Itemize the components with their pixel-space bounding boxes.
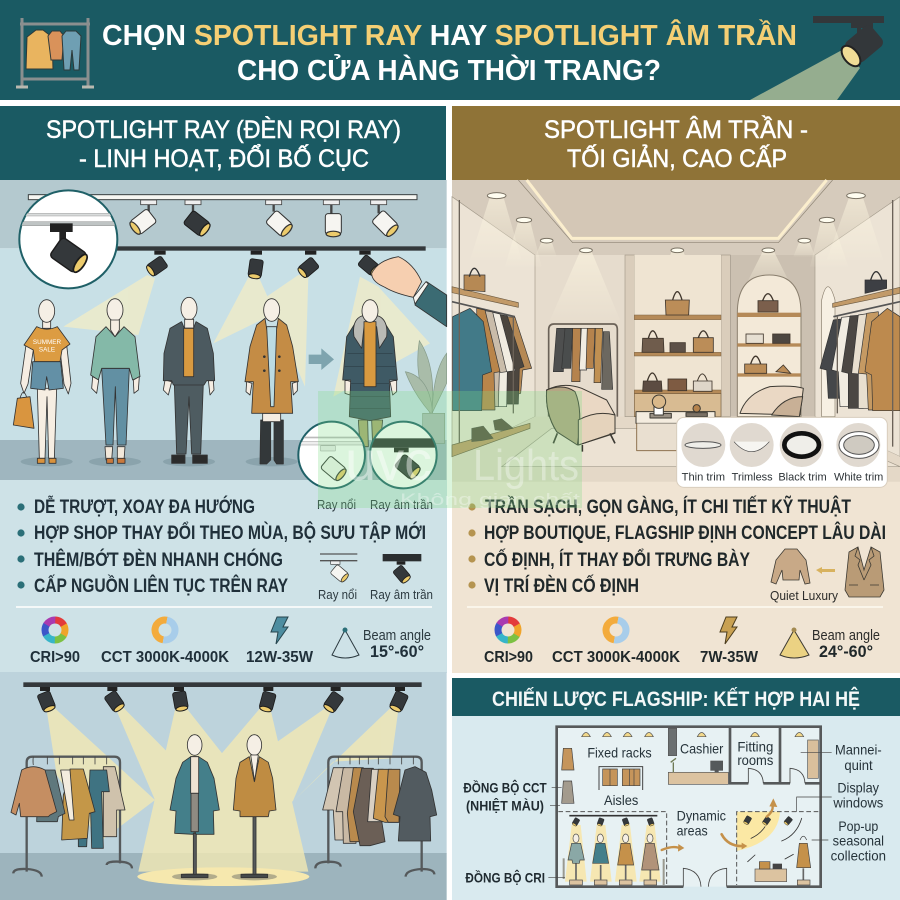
stat: CRI: CRI>90 [30, 649, 80, 666]
left clothing rack [452, 200, 532, 457]
plan labels: Mannei- [835, 741, 882, 757]
plan labels: Pop-up [838, 818, 879, 834]
text: summer sale: SUMMER [33, 339, 61, 346]
right panel heading: TỐI GIẢN, CAO CẤP [567, 143, 787, 173]
plan labels: Cashier [680, 740, 724, 756]
stat: beam angle: 24°-60° [819, 642, 873, 661]
stat: beam angle: Beam angle [363, 628, 431, 644]
bullet list: THÊM/BỚT ĐÈN NHANH CHÓNG [34, 549, 283, 571]
labels under callouts: Ray âm trần [370, 497, 433, 512]
plan labels: areas [677, 823, 708, 839]
labels under rail icons [318, 587, 433, 602]
callout: trim types [677, 417, 887, 487]
panel: downlight boutique scene [452, 180, 900, 487]
bullet list [468, 496, 886, 597]
trim labels: White trim [834, 472, 883, 484]
icon: hand adjusting spot [372, 257, 447, 327]
ceiling [452, 180, 900, 255]
panel: retail rails and mannequins [0, 672, 447, 900]
trim labels: Thin trim [682, 472, 725, 484]
icon: spotlight with beam [750, 16, 885, 100]
centre rack [549, 324, 617, 417]
wall garments [562, 748, 574, 803]
ceiling lamps [582, 732, 804, 737]
heading [452, 678, 900, 716]
bullet list: CỐ ĐỊNH, ÍT THAY ĐỔI TRƯNG BÀY [484, 549, 750, 571]
title: CHỌN SPOTLIGHT RAY HAY SPOTLIGHT ÂM TRẦN [102, 18, 797, 52]
walls [557, 727, 821, 887]
callout: spot closeup [17, 190, 120, 288]
mannequin: camel coat [245, 299, 298, 466]
labels under rail icons: Ray nổi [318, 587, 357, 602]
stat: wattage [700, 617, 759, 666]
panel: right text and specs [452, 481, 900, 673]
stat: CRI [30, 620, 80, 666]
plan labels: rooms [737, 752, 773, 768]
icon: surface rail [320, 554, 357, 584]
bullet list: CẤP NGUỒN LIÊN TỤC TRÊN RAY [34, 575, 288, 597]
plan labels: seasonal [833, 833, 884, 849]
title: CHO CỬA HÀNG THỜI TRANG? [237, 53, 661, 87]
fixed zone track and mannequins [563, 816, 665, 885]
left panel heading: SPOTLIGHT RAY (ĐÈN RỌI RAY) [46, 115, 401, 144]
light pool [137, 867, 309, 886]
trim labels [682, 472, 883, 484]
right panel heading: SPOTLIGHT ÂM TRẦN - [544, 115, 808, 144]
right clothing rack [820, 200, 900, 447]
right rack with clothes [315, 757, 437, 877]
floor plan [463, 727, 886, 887]
stat: CCT: CCT 3000K-4000K [101, 649, 229, 666]
text: summer sale: SALE [39, 347, 55, 354]
left panel heading: - LINH HOẠT, ĐỔI BỐ CỤC [79, 143, 369, 173]
dashed zones [558, 812, 818, 885]
labels under callouts: Ray nổi [317, 497, 356, 512]
icon: sweater [771, 549, 810, 584]
sync labels: ĐỒNG BỘ CCT [463, 779, 547, 796]
plan labels: quint [844, 757, 873, 773]
plan labels [587, 739, 886, 863]
labels under callouts [317, 497, 433, 512]
right panel heading [452, 106, 900, 181]
bullet list: DỄ TRƯỢT, XOAY ĐA HƯỚNG [34, 496, 255, 518]
mannequin: winter parka [343, 300, 397, 447]
panel: track light scene [0, 180, 447, 488]
plant [405, 341, 447, 443]
leader lines [548, 752, 832, 877]
fitting box [808, 740, 818, 778]
watermark: Không gian chất [400, 490, 580, 509]
stat: CRI [484, 620, 533, 666]
mannequin: grey suit [163, 297, 215, 466]
armchairs and coffee table [546, 385, 803, 452]
track and spots [23, 682, 422, 714]
watermark: Lights [473, 441, 579, 490]
arrow: quiet luxury [816, 567, 835, 574]
watermark: uvc [345, 429, 432, 492]
centre shelving [634, 255, 721, 417]
stat: CCT [101, 618, 229, 666]
bullet list: VỊ TRÍ ĐÈN CỐ ĐỊNH [484, 575, 639, 597]
light beams [63, 275, 430, 397]
left rack with clothes [11, 757, 132, 877]
plan labels: Dynamic [677, 807, 726, 823]
sync labels: ĐỒNG BỘ CRI [465, 868, 545, 885]
trim labels: Trimless [732, 472, 773, 484]
mannequin with teal coat [170, 735, 219, 880]
stat: CCT: CCT 3000K-4000K [552, 649, 680, 666]
black track with spots [113, 246, 426, 279]
plan labels: windows [832, 795, 883, 811]
stat: CCT [552, 618, 680, 666]
plan labels: Aisles [604, 792, 638, 808]
plan labels: Fitting [737, 739, 773, 755]
icon: blazer [845, 547, 884, 597]
light beams [47, 708, 398, 872]
callout: surface track [297, 422, 367, 488]
stat: wattage [246, 617, 314, 666]
left panel heading [0, 106, 446, 181]
mannequin: summer outfit [13, 300, 73, 466]
mannequin with camel blazer [232, 735, 277, 880]
panel: left text and specs [0, 480, 447, 673]
icon: clothes rack [16, 18, 94, 87]
sync labels [463, 779, 547, 885]
arrow: change outfit [309, 348, 334, 370]
downlights [470, 193, 883, 320]
labels under rail icons: Ray âm trần [370, 587, 433, 602]
bullet list: HỢP SHOP THAY ĐỔI THEO MÙA, BỘ SƯU TẬP MỚI [34, 522, 426, 544]
trim labels: Black trim [778, 472, 827, 484]
cashier [668, 728, 728, 784]
sync labels: (NHIỆT MÀU) [466, 797, 544, 814]
handbags [642, 292, 791, 391]
stat: CRI: CRI>90 [484, 649, 533, 666]
stat: beam angle: Beam angle [812, 628, 880, 644]
stat: wattage: 7W-35W [700, 649, 759, 666]
callout: recessed track [370, 422, 440, 488]
label: quiet luxury: Quiet Luxury [770, 588, 838, 603]
popup zone items [743, 815, 811, 885]
title [102, 18, 797, 87]
flow arrows [662, 798, 802, 862]
stat: beam angle [780, 628, 880, 661]
stat: beam angle [332, 628, 431, 661]
plan labels: Display [837, 779, 879, 795]
icon: recessed rail [383, 554, 421, 585]
header banner [0, 0, 900, 100]
stat: wattage: 12W-35W [246, 649, 314, 666]
stat: beam angle: 15°-60° [370, 642, 424, 661]
plan labels: Fixed racks [587, 745, 652, 761]
bullet list [17, 496, 426, 597]
fixed rack [599, 767, 643, 790]
mannequin: green shirt and jeans [89, 299, 141, 466]
watermark [318, 391, 582, 509]
text: summer sale [33, 339, 61, 354]
arched niche [737, 275, 835, 417]
panel: flagship strategy [452, 678, 900, 900]
pop-up light zone [737, 812, 780, 851]
back wall and side walls [452, 197, 900, 482]
white track with surface spots [28, 195, 417, 239]
plan labels: collection [831, 847, 886, 863]
